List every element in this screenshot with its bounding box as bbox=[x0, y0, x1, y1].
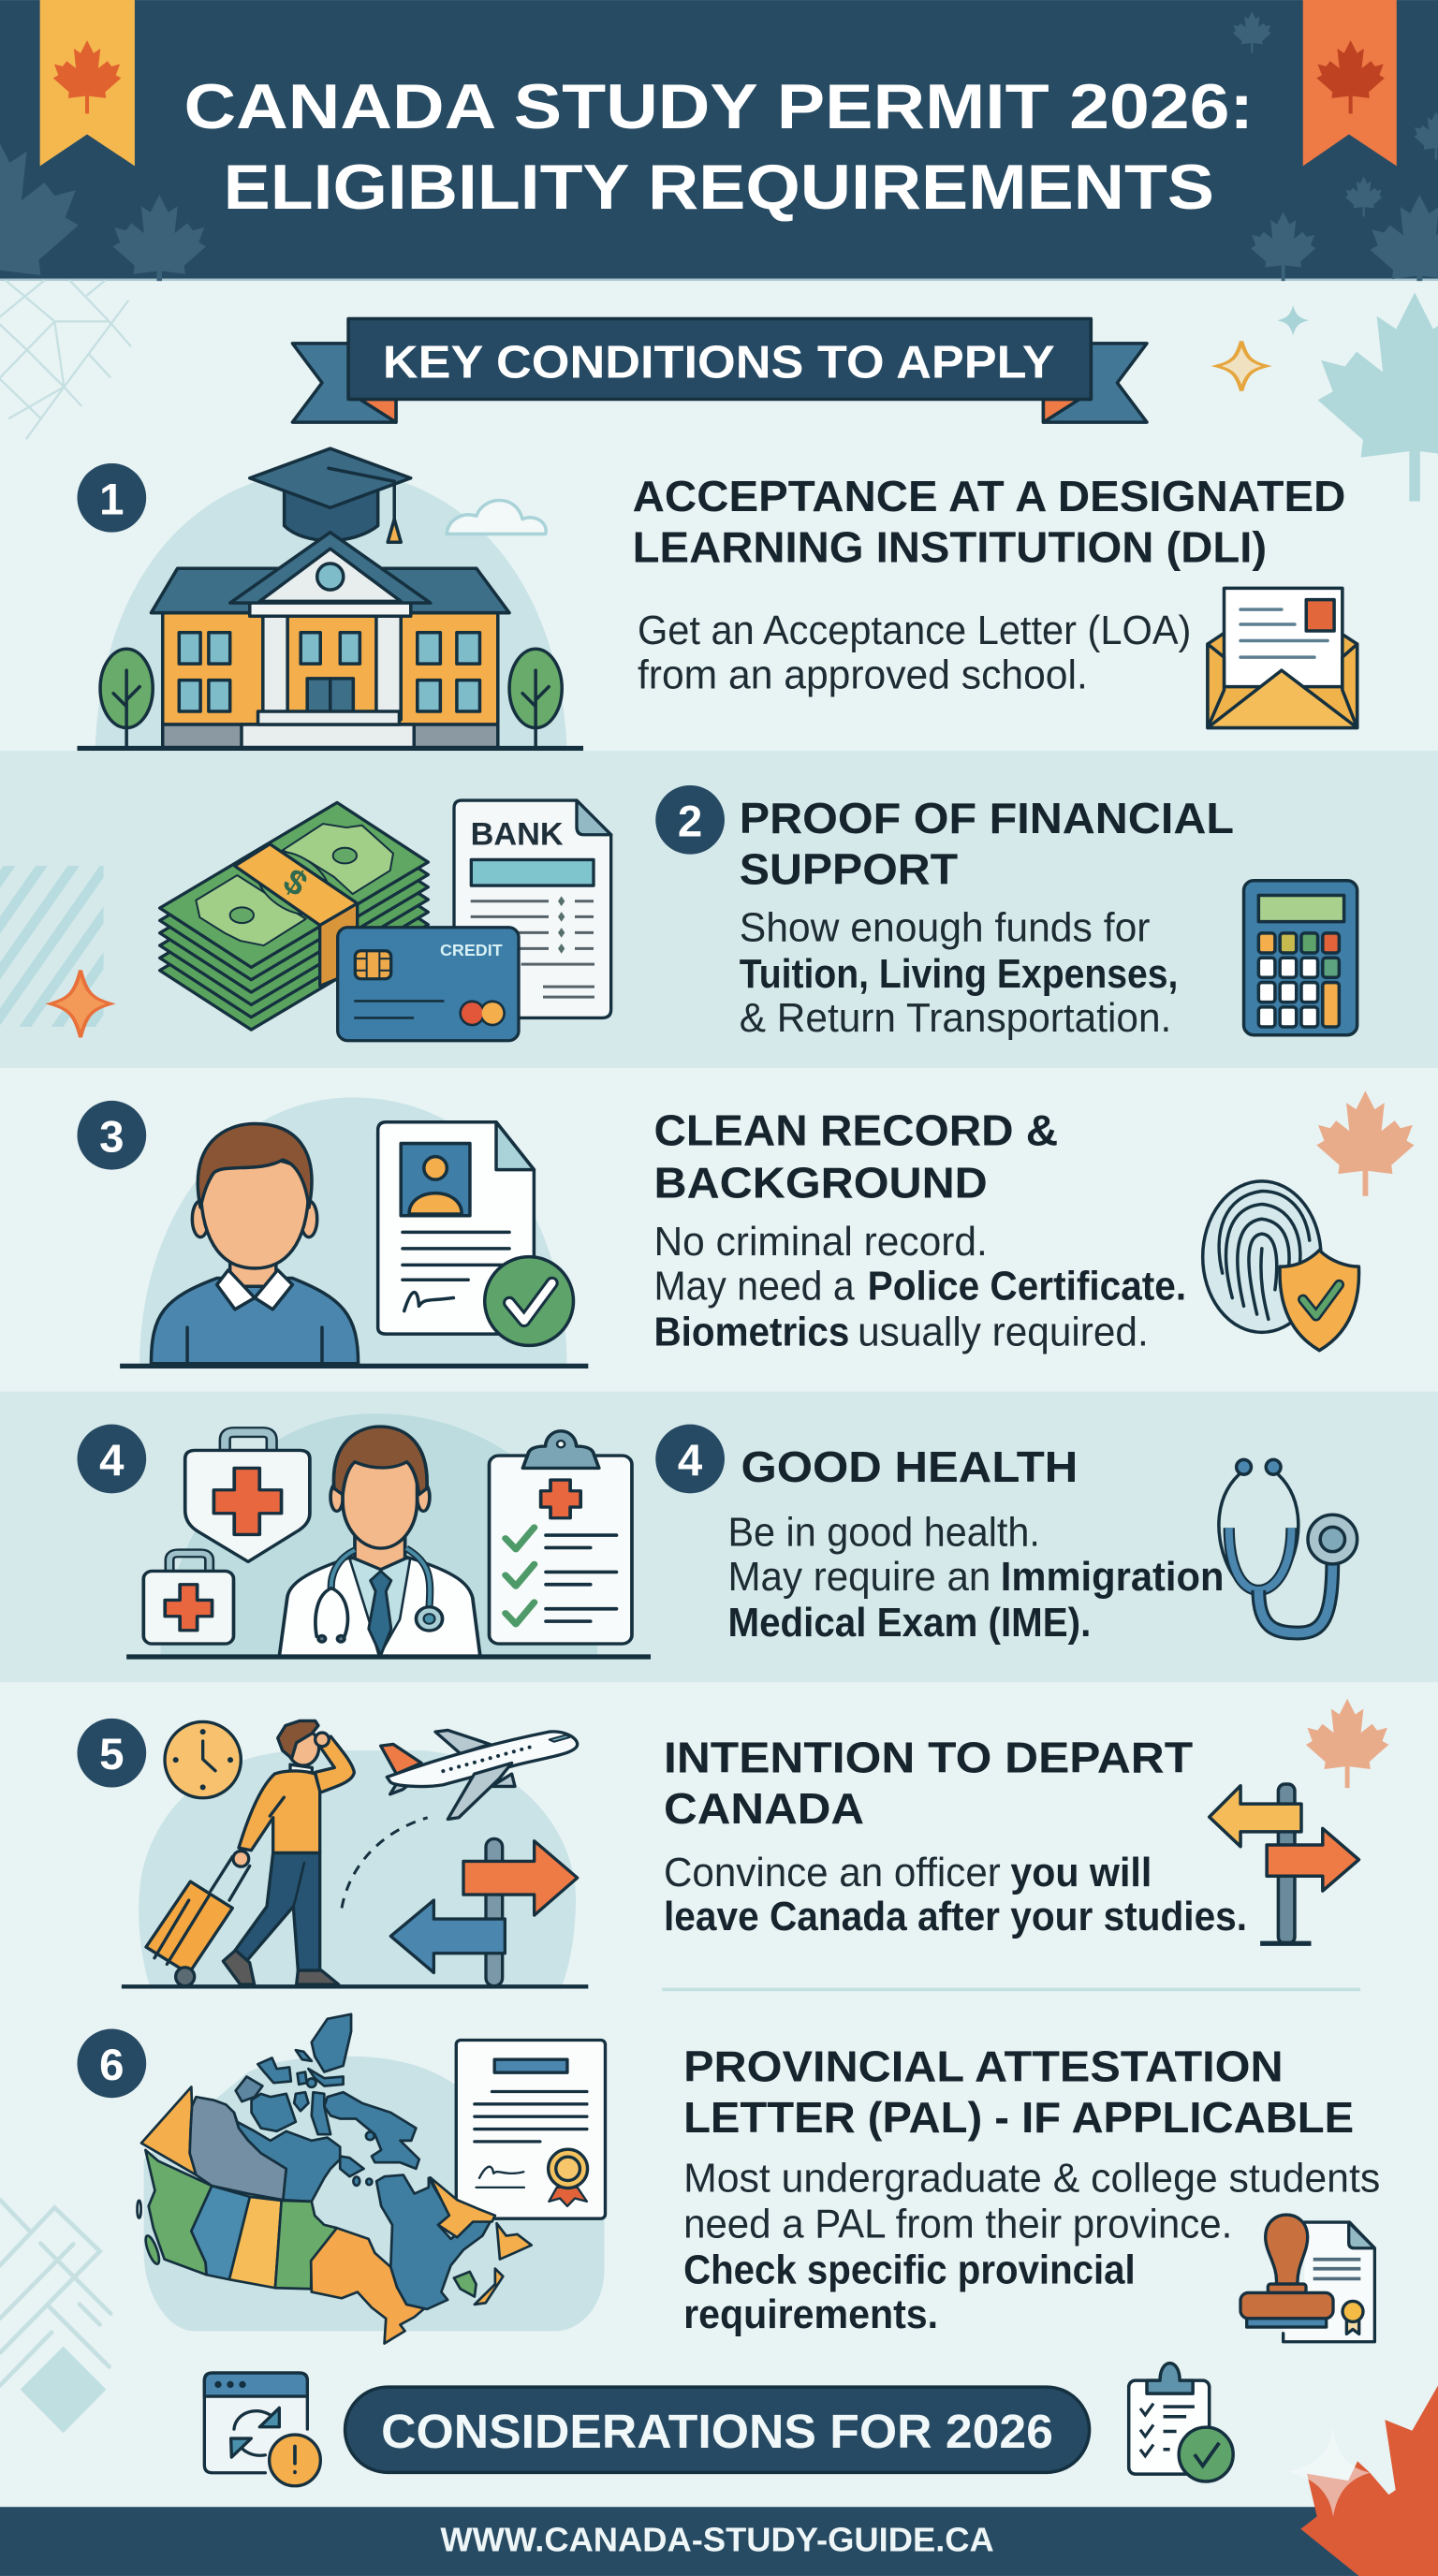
body text 6: Check specific provincial bbox=[683, 2247, 1136, 2293]
icon: fingerprint with shield bbox=[1203, 1181, 1359, 1351]
decorative large mint maple leaf bbox=[1318, 292, 1438, 501]
number badge 1: 1 bbox=[99, 475, 125, 524]
section banner: key conditions: KEY CONDITIONS TO APPLY bbox=[383, 338, 1055, 388]
icon: browser with refresh arrows and warning bbox=[204, 2373, 320, 2486]
icon: checklist clipboard with check bbox=[1129, 2364, 1233, 2481]
illustration: cash stack: $ bbox=[277, 860, 315, 904]
ground line bbox=[77, 746, 583, 751]
number badge 6: 6 bbox=[99, 2041, 125, 2090]
panel: item 6 provincial attestation letter bbox=[77, 2014, 1380, 2344]
body text 2 bbox=[740, 905, 1178, 1041]
ground line bbox=[122, 1984, 588, 1989]
number badge 3 bbox=[77, 1101, 146, 1170]
panel: item 5 intention to depart bbox=[77, 1699, 1388, 1991]
icon: rubber stamp and document bbox=[1240, 2215, 1374, 2342]
header panel bbox=[0, 0, 1438, 330]
heading 6 bbox=[683, 2042, 1354, 2142]
sparkle: gold bbox=[1216, 342, 1267, 391]
body text 4: May require an bbox=[727, 1554, 990, 1600]
panel: item 4 good health bbox=[0, 1392, 1438, 1682]
right ribbon with maple leaf bbox=[1303, 0, 1397, 166]
body text 5: Convince an officer bbox=[664, 1850, 1001, 1895]
panel: item 2 financial support bbox=[0, 751, 1438, 1068]
left ribbon with maple leaf bbox=[40, 0, 135, 166]
heading 4: GOOD HEALTH bbox=[741, 1442, 1078, 1491]
number badge 4 right bbox=[655, 1425, 725, 1493]
heading 5: CANADA bbox=[664, 1784, 864, 1833]
title: ELIGIBILITY REQUIREMENTS bbox=[224, 153, 1214, 223]
panel: item 1 DLI acceptance bbox=[77, 448, 1357, 751]
heading 5: INTENTION TO DEPART bbox=[664, 1734, 1193, 1782]
body text 4 bbox=[727, 1510, 1224, 1646]
heading 6: LETTER (PAL) - IF APPLICABLE bbox=[683, 2093, 1354, 2142]
decorative lattice top left bbox=[0, 281, 130, 438]
number badge 6 bbox=[77, 2029, 146, 2098]
decorative salmon maple leaf bbox=[1306, 1699, 1388, 1788]
considerations pill: CONSIDERATIONS FOR 2026 bbox=[381, 2405, 1053, 2458]
icon: envelope with letter bbox=[1208, 588, 1357, 728]
decorative lines bottom left bbox=[0, 2200, 110, 2385]
heading 5 bbox=[664, 1734, 1193, 1833]
decorative salmon maple leaf bbox=[1316, 1090, 1415, 1196]
number badge 2: 2 bbox=[678, 797, 702, 846]
heading 1 bbox=[633, 472, 1345, 571]
heading 6: PROVINCIAL ATTESTATION bbox=[683, 2042, 1284, 2091]
body text 3: Police Certificate. bbox=[868, 1263, 1186, 1309]
sparkle: mint bbox=[1277, 305, 1309, 335]
number badge 3: 3 bbox=[99, 1112, 125, 1162]
decorative red maple leaf corner bbox=[1287, 2385, 1438, 2576]
header background maple leaves bbox=[0, 11, 1438, 314]
body text 1: from an approved school. bbox=[638, 651, 1088, 697]
body text 6: requirements. bbox=[683, 2291, 938, 2337]
title bbox=[184, 72, 1254, 223]
body text 6 bbox=[683, 2155, 1380, 2337]
number badge 4 left bbox=[77, 1425, 146, 1493]
ground line bbox=[126, 1654, 651, 1660]
icon: stethoscope bbox=[1219, 1459, 1357, 1633]
illustration: map of Canada with certificate bbox=[138, 2014, 605, 2344]
heading 3: CLEAN RECORD & bbox=[654, 1105, 1058, 1154]
divider bbox=[662, 1988, 1360, 1991]
number badge 5: 5 bbox=[99, 1730, 125, 1779]
illustration: doctor with medical kits and clipboard bbox=[143, 1413, 632, 1656]
body text 2: Tuition, Living Expenses, bbox=[740, 951, 1178, 997]
illustration: applicant and record document bbox=[139, 1097, 574, 1365]
body text 3: usually required. bbox=[858, 1309, 1149, 1354]
ground line bbox=[120, 1364, 588, 1368]
icon: direction signpost bbox=[1210, 1784, 1358, 1943]
body text 3 bbox=[654, 1219, 1186, 1354]
number badge 4 right: 4 bbox=[678, 1436, 703, 1486]
heading 1: LEARNING INSTITUTION (DLI) bbox=[633, 522, 1267, 571]
body text 2: Show enough funds for bbox=[740, 905, 1151, 951]
body text 4: Medical Exam (IME). bbox=[727, 1600, 1091, 1646]
footer band bbox=[0, 2507, 1438, 2576]
body text 6: Most undergraduate & college students bbox=[683, 2155, 1380, 2201]
body text 4: Immigration bbox=[1001, 1554, 1224, 1600]
illustration: credit card bbox=[338, 928, 519, 1041]
body text 3: No criminal record. bbox=[654, 1219, 988, 1265]
body text 3: May need a bbox=[654, 1263, 855, 1309]
sparkle: orange bbox=[51, 971, 110, 1037]
title: CANADA STUDY PERMIT 2026: bbox=[184, 72, 1254, 142]
heading 3 bbox=[654, 1105, 1058, 1207]
heading 1: ACCEPTANCE AT A DESIGNATED bbox=[633, 472, 1345, 520]
body text 5: leave Canada after your studies. bbox=[664, 1894, 1247, 1939]
body text 3: Biometrics bbox=[654, 1309, 849, 1354]
body text 4: Be in good health. bbox=[727, 1510, 1040, 1556]
body text 2: & Return Transportation. bbox=[740, 995, 1171, 1041]
heading 3: BACKGROUND bbox=[654, 1158, 988, 1207]
panel: item 3 clean record bbox=[77, 1090, 1415, 1368]
icon: calculator bbox=[1244, 881, 1357, 1035]
body text 6: need a PAL from their province. bbox=[683, 2201, 1232, 2247]
decorative diamond bbox=[21, 2347, 106, 2433]
section banner: key conditions bbox=[292, 319, 1147, 422]
illustration: bank statement: BANK bbox=[471, 816, 564, 852]
heading 2 bbox=[740, 794, 1234, 893]
illustration: credit card: CREDIT bbox=[440, 941, 503, 959]
body text 1: Get an Acceptance Letter (LOA) bbox=[638, 607, 1191, 653]
footer website address: WWW.CANADA-STUDY-GUIDE.CA bbox=[440, 2521, 994, 2559]
body text 1 bbox=[638, 607, 1191, 697]
considerations pill bbox=[345, 2387, 1090, 2472]
number badge 5 bbox=[77, 1719, 146, 1788]
number badge 2 bbox=[655, 785, 725, 855]
heading 2: PROOF OF FINANCIAL bbox=[740, 794, 1234, 842]
body text 5: you will bbox=[1010, 1850, 1152, 1895]
body text 5 bbox=[664, 1850, 1247, 1939]
number badge 1 bbox=[77, 463, 146, 533]
decorative stripes bbox=[0, 866, 104, 1027]
illustration: traveller, plane and signpost bbox=[139, 1720, 578, 1986]
number badge 4 left: 4 bbox=[99, 1436, 125, 1486]
illustration: bank statement bbox=[454, 800, 611, 1017]
heading 2: SUPPORT bbox=[740, 844, 958, 893]
illustration: cash stack bbox=[160, 802, 428, 1030]
illustration: school with graduation cap bbox=[95, 448, 566, 748]
